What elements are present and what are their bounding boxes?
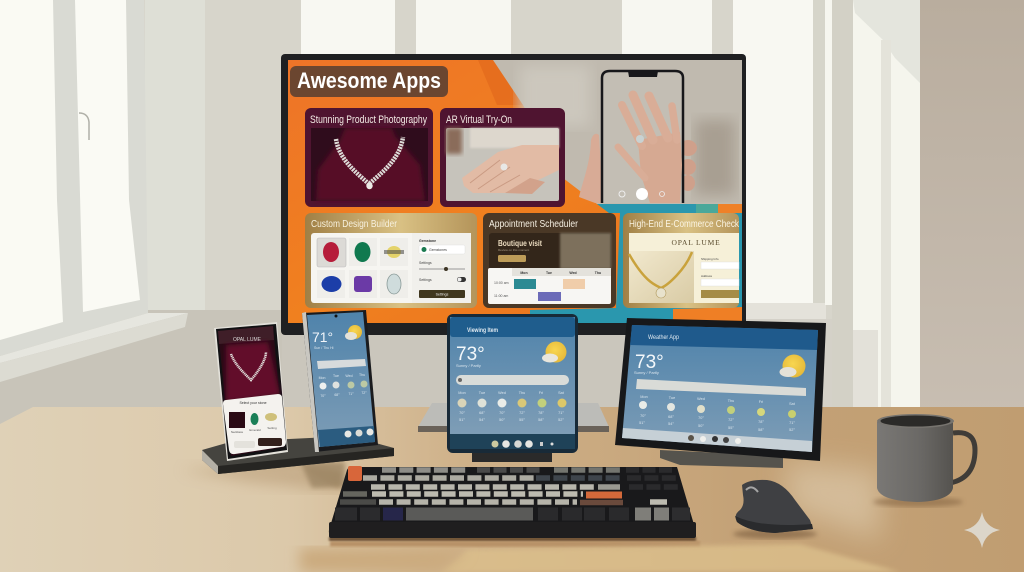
coffee mug bbox=[873, 414, 975, 507]
forecast: 68° bbox=[668, 415, 674, 419]
forecast: 50° bbox=[698, 424, 704, 428]
product sheet bbox=[223, 394, 286, 454]
handle bbox=[950, 433, 975, 483]
forecast: Fri bbox=[539, 391, 543, 395]
forecast: Mon bbox=[458, 391, 466, 395]
tablet: weather: Weather App bbox=[648, 335, 680, 341]
card: AR Virtual Try-On: AR Virtual Try-On bbox=[446, 114, 512, 126]
screen background bbox=[288, 60, 742, 323]
phone: weather: 71° bbox=[312, 329, 333, 345]
forecast: Mon bbox=[640, 395, 648, 399]
forecast: 52° bbox=[789, 428, 795, 432]
forecast bbox=[639, 395, 796, 432]
controls: Gemstone bbox=[419, 239, 436, 243]
phone: weather bbox=[302, 310, 378, 452]
dock bbox=[450, 434, 575, 449]
forecast: Fri bbox=[759, 400, 763, 404]
monitor bbox=[281, 54, 746, 335]
card: High-End E-Commerce Checkout: OPAL LUME bbox=[672, 238, 720, 247]
product sheet: Necklace bbox=[231, 430, 243, 434]
foldable: weather: Sunny / Partly bbox=[456, 363, 481, 368]
calendar: 10:00 am bbox=[494, 281, 509, 285]
forecast: Thu bbox=[519, 391, 525, 395]
card: Appointment Scheduler: Appointment Scheduler bbox=[489, 218, 578, 230]
tablet: weather: Sunny / Partly bbox=[634, 370, 659, 375]
foldable stand bbox=[472, 452, 552, 462]
room background bbox=[0, 0, 1024, 430]
forecast: 52° bbox=[558, 418, 564, 422]
forecast: 70° bbox=[459, 411, 465, 415]
forecast: 55° bbox=[519, 418, 525, 422]
forecast: 54° bbox=[668, 422, 674, 426]
necklace bbox=[336, 137, 403, 184]
foldable: weather: 73° bbox=[456, 344, 485, 365]
forecast: Tue bbox=[669, 396, 675, 400]
dock bbox=[688, 435, 741, 444]
phone: AR try-on bbox=[579, 71, 697, 203]
phone: weather: 68° bbox=[334, 393, 340, 397]
forecast: Tue bbox=[479, 391, 485, 395]
forecast: Thu bbox=[728, 399, 734, 403]
keycaps bbox=[335, 470, 690, 514]
calendar: Tue bbox=[546, 271, 552, 275]
orange escape key bbox=[348, 466, 362, 481]
hand bbox=[462, 145, 559, 194]
forecast: Wed bbox=[498, 391, 506, 395]
card: Custom Design Builder bbox=[305, 213, 477, 308]
tablet stand bbox=[660, 450, 783, 468]
product sheet: Select your stone bbox=[239, 401, 267, 405]
forecast: 58° bbox=[538, 418, 544, 422]
calendar: 11:00 am bbox=[494, 294, 508, 298]
dock shadow on desk bbox=[225, 466, 340, 490]
controls: Settings bbox=[419, 261, 432, 265]
forecast: 78° bbox=[758, 420, 764, 424]
forecast: 55° bbox=[728, 426, 734, 430]
foldable: weather: Viewing Item bbox=[467, 327, 498, 334]
card: AR Virtual Try-On bbox=[440, 108, 565, 207]
hand inside phone bbox=[618, 95, 682, 203]
forecast: Wed bbox=[697, 397, 705, 401]
card: High-End E-Commerce Checkout bbox=[623, 213, 740, 308]
forecast: 78° bbox=[538, 411, 544, 415]
window: top and right bbox=[301, 0, 1024, 420]
phone: jewellery app bbox=[214, 322, 288, 461]
sparkle watermark bbox=[964, 512, 1000, 548]
tablet: weather bbox=[615, 318, 826, 461]
phone: weather: 72° bbox=[361, 391, 367, 395]
forecast: 51° bbox=[639, 421, 645, 425]
forecast: 70° bbox=[640, 414, 646, 418]
forecast: 70° bbox=[698, 416, 704, 420]
hand: right bbox=[679, 140, 697, 191]
product sheet: Emerald bbox=[249, 428, 261, 432]
window handle bbox=[79, 113, 89, 140]
phone dock bbox=[202, 436, 394, 474]
card: Stunning Product Photography bbox=[305, 108, 433, 207]
forecast: 70° bbox=[499, 411, 505, 415]
phone: weather: Mon bbox=[319, 376, 325, 380]
camera buttons bbox=[619, 191, 625, 197]
mouse bbox=[733, 480, 817, 539]
phone: weather: 71° bbox=[348, 392, 354, 396]
laptop base behind foldable bbox=[418, 403, 609, 432]
controls: Settings bbox=[436, 292, 449, 296]
controls: Settings bbox=[419, 278, 432, 282]
title badge: Awesome Apps bbox=[297, 68, 441, 93]
controls: Gemstones bbox=[429, 248, 447, 252]
forecast: 54° bbox=[479, 418, 485, 422]
keyboard bbox=[329, 466, 696, 541]
forecast: 71° bbox=[789, 421, 795, 425]
card: Custom Design Builder: Custom Design Builder bbox=[311, 218, 397, 230]
calendar: Wed bbox=[569, 271, 577, 275]
phone: weather: Wed bbox=[345, 374, 353, 378]
foldable: weather bbox=[447, 314, 578, 453]
card: Appointment Scheduler: Review on this moment bbox=[498, 248, 529, 252]
forecast: Sat bbox=[558, 391, 565, 395]
forecast: Sat bbox=[789, 402, 796, 406]
forecast: 71° bbox=[558, 411, 564, 415]
forecast: 72° bbox=[728, 418, 734, 422]
phone: weather: Tue bbox=[333, 374, 339, 378]
controls bbox=[412, 233, 471, 303]
card: High-End E-Commerce Checkout: High-End E-Commerce Check bbox=[629, 218, 740, 230]
weather sun bbox=[542, 342, 566, 362]
card: High-End E-Commerce Checkout: Shipping Info bbox=[701, 257, 719, 261]
gems bbox=[322, 242, 404, 294]
product sheet: Setting bbox=[267, 426, 277, 430]
card: Stunning Product Photography: Stunning Product Photography bbox=[310, 114, 427, 126]
calendar bbox=[488, 268, 611, 304]
weather sun bbox=[345, 325, 362, 340]
card: Appointment Scheduler bbox=[483, 213, 616, 308]
card: Appointment Scheduler: Boutique visit bbox=[498, 239, 542, 248]
calendar: Mon bbox=[520, 271, 528, 275]
forecast: 50° bbox=[499, 418, 505, 422]
card: High-End E-Commerce Checkout: Address bbox=[701, 274, 713, 278]
hand: left bbox=[579, 134, 603, 203]
tablet: weather: 73° bbox=[635, 352, 664, 373]
weather sun bbox=[780, 354, 806, 378]
phone: weather: Thu bbox=[359, 373, 365, 377]
forecast: 58° bbox=[758, 428, 764, 432]
forecast bbox=[458, 391, 565, 422]
forecast: 68° bbox=[479, 411, 485, 415]
phone: jewellery app: OPAL LUME bbox=[233, 337, 262, 343]
window: left bbox=[0, 0, 188, 382]
phone: weather: Sun / Thu Hi bbox=[314, 346, 334, 350]
desk bbox=[0, 407, 1024, 572]
phone: weather: 70° bbox=[320, 394, 326, 398]
calendar: Thu bbox=[595, 271, 601, 275]
forecast: 72° bbox=[519, 411, 525, 415]
forecast: 51° bbox=[459, 418, 465, 422]
